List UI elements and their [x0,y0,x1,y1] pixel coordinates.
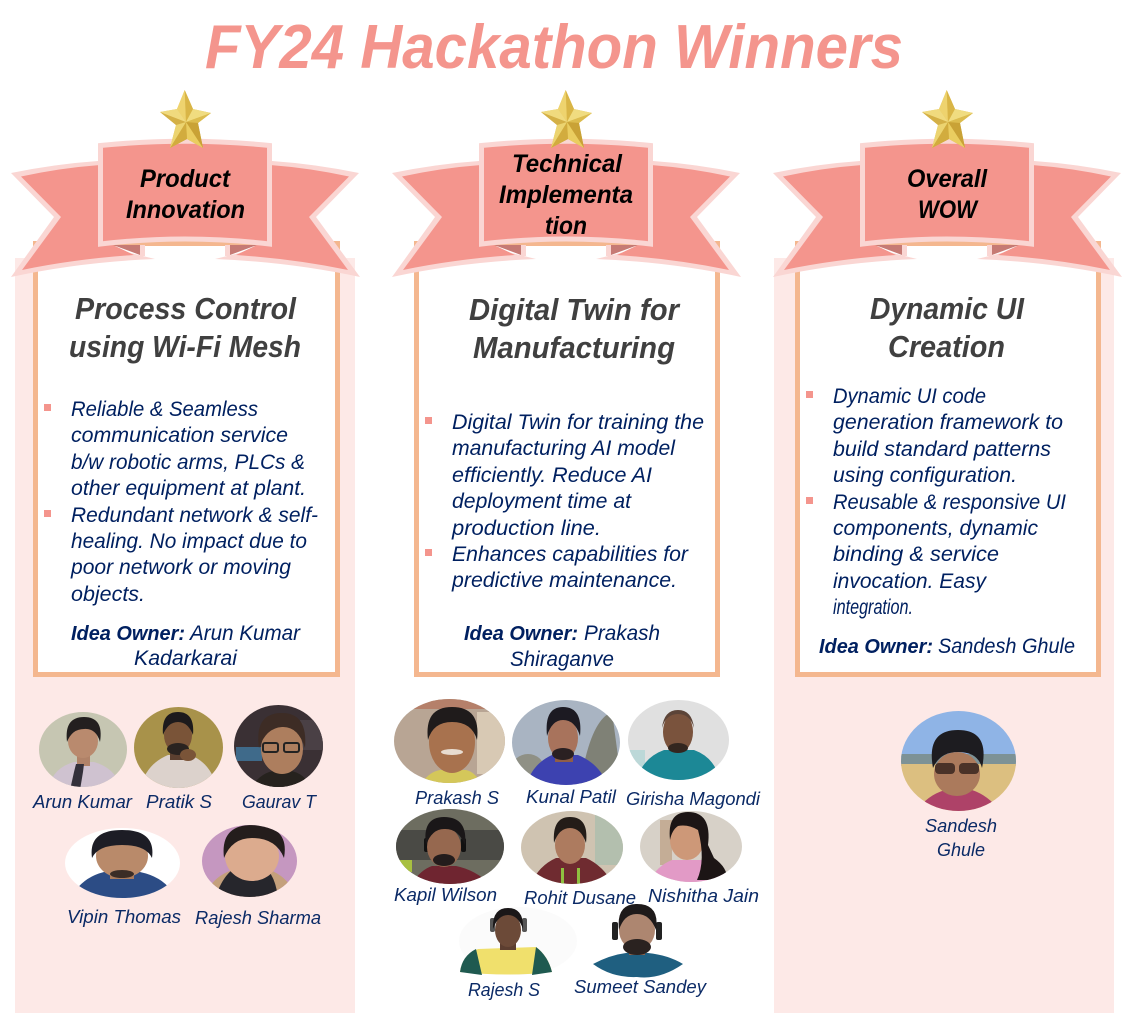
card: Dynamic UI Creation [798,244,1098,674]
team photo: Rajesh S [459,907,577,975]
names [394,786,761,1000]
project heading [870,291,1025,364]
names: Kapil Wilson [394,884,497,905]
project heading [469,292,681,365]
names: Prakash S [415,787,500,808]
ribbon label [126,165,245,224]
panel: Overall WOW [773,90,1122,860]
project heading [69,291,301,364]
title: FY24 Hackathon Winners [205,13,903,82]
idea owner: Prakash [584,622,660,645]
bullet list: generation framework to [833,411,1063,434]
team photo: Sumeet Sandey [593,904,683,977]
bullet list [44,398,318,606]
project heading: using Wi-Fi Mesh [69,329,301,364]
team photo: Rajesh Sharma [200,823,300,899]
names [925,815,997,860]
bullet list: deployment time at [452,490,632,513]
idea owner [71,622,301,670]
names: Rajesh S [468,979,541,1000]
names: Kunal Patil [526,786,617,807]
bullet list: healing. No impact due to [71,530,307,553]
bullet list: manufacturing AI model [452,437,676,460]
bullet list: invocation. Easy [833,570,987,593]
names: Nishitha Jain [648,885,759,906]
team photo: Prakash S [394,699,505,783]
bullet list: b/w robotic arms, PLCs & [71,451,305,474]
names: Gaurav T [242,791,318,812]
bullet list: integration. [833,596,913,619]
project heading: Manufacturing [473,330,675,365]
card: Process Control using Wi-Fi Mesh [36,244,338,674]
idea owner: Arun Kumar [188,622,301,645]
ribbon label [499,150,633,240]
bullet list: Enhances capabilities for [452,543,689,566]
ribbon: Technical Implementation [392,141,741,277]
ribbon: Product Innovation [11,141,360,277]
ribbon label: Innovation [126,196,245,224]
names: Girisha Magondi [626,788,761,809]
bullet list: Redundant network & self- [71,504,318,527]
bullet list: components, dynamic [833,517,1038,540]
bullet list [425,411,704,592]
bullet list [806,385,1066,619]
names: Sandesh [925,815,997,836]
bullet list: Dynamic UI code [833,385,986,408]
bullet list: efficiently. Reduce AI [452,464,652,487]
ribbon: Overall WOW [773,141,1122,277]
panel background: Overall WOW [774,258,1114,1013]
team photo: Girisha Magondi [625,698,731,782]
names: Sumeet Sandey [574,976,708,997]
bullet list: binding & service [833,543,999,566]
names: Arun Kumar [32,791,133,812]
ribbon label: Implementa [499,181,633,209]
bullet list: communication service [71,424,288,447]
idea owner: Idea Owner: [819,636,933,658]
team photo: Arun Kumar [39,712,127,787]
team photo: Rohit Dusane [521,811,623,884]
team photo: Kapil Wilson [396,809,504,884]
idea owner [819,635,1075,658]
idea owner: Sandesh Ghule [938,635,1075,658]
bullet list: predictive maintenance. [451,569,677,592]
names: Pratik S [146,791,213,812]
team photo: Nishitha Jain [640,811,742,882]
idea owner: Shiraganve [510,648,614,671]
project heading: Creation [888,329,1005,364]
names: Vipin Thomas [67,906,181,927]
panel background: Product Innovation [15,258,355,1013]
project heading: Dynamic UI [870,291,1025,326]
bullet list: Reliable & Seamless [71,398,258,421]
ribbon label: Technical [512,150,623,178]
names [32,791,321,928]
team photo: Sandesh Ghule [901,711,1016,811]
idea owner [464,622,660,671]
names: Ghule [937,839,985,860]
bullet list: objects. [71,583,145,606]
idea owner: Idea Owner: [464,623,578,645]
card: Digital Twin for Manufacturing [416,244,718,674]
names: Rajesh Sharma [195,907,321,928]
team photo: Pratik S [134,707,223,788]
ribbon label [907,165,988,224]
ribbon label: tion [545,212,587,240]
ribbon label: WOW [918,196,979,224]
panel: Product Innovation [11,90,360,928]
icon: gold star [922,90,973,148]
names: Rohit Dusane [524,887,636,908]
bullet list: other equipment at plant. [71,477,306,500]
icon: gold star [160,90,211,148]
bullet list: using configuration. [833,464,1017,487]
bullet list: production line. [451,517,601,540]
panel: Technical Implementation [390,90,761,1000]
bullet list: Reusable & responsive UI [833,491,1066,514]
project heading: Digital Twin for [469,292,681,327]
bullet list: poor network or moving [70,556,291,579]
icon: gold star [541,90,592,148]
team photo: Kunal Patil [510,698,622,788]
team photo: Vipin Thomas [65,828,180,898]
idea owner: Kadarkarai [134,647,238,670]
idea owner: Idea Owner: [71,623,185,645]
project heading: Process Control [75,291,297,326]
bullet list: build standard patterns [833,438,1052,461]
ribbon label: Overall [907,165,988,193]
team photo: Gaurav T [234,705,323,787]
ribbon label: Product [140,165,232,193]
bullet list: Digital Twin for training the [452,411,704,434]
